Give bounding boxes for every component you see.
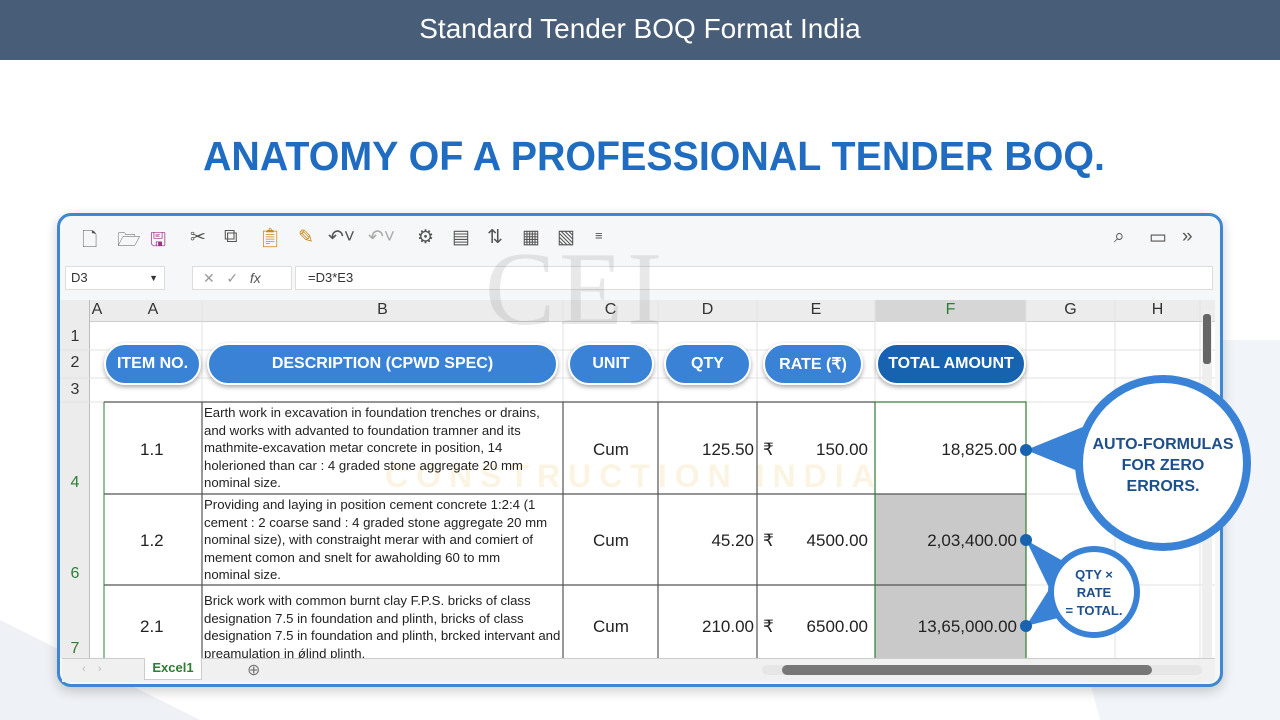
text: TOTAL AMOUNT bbox=[888, 355, 1014, 372]
toolbar: ▭ bbox=[1149, 227, 1167, 248]
toolbar: ▤ bbox=[452, 227, 470, 248]
callout: auto-formulas: FOR ZERO bbox=[1122, 457, 1204, 474]
callout: qty x rate: RATE bbox=[1077, 585, 1112, 600]
text: 4 bbox=[71, 474, 79, 491]
callout: qty x rate: = TOTAL. bbox=[1066, 603, 1122, 618]
text: 210.00 bbox=[702, 617, 754, 636]
sheet tab bar: Excel1 bbox=[152, 660, 194, 675]
text: CONSTRUCTION INDIA bbox=[385, 458, 883, 494]
text: 6 bbox=[71, 565, 79, 582]
text: ₹ bbox=[763, 440, 774, 459]
toolbar: ≡ bbox=[595, 228, 603, 243]
text: C bbox=[605, 301, 616, 318]
toolbar: ⇅ bbox=[487, 227, 503, 248]
sheet tab bar: ‹ › bbox=[82, 663, 102, 675]
text: 125.50 bbox=[702, 440, 754, 459]
toolbar: ⌕ bbox=[1114, 226, 1125, 247]
callout: auto-formulas: AUTO-FORMULAS bbox=[1092, 436, 1234, 453]
toolbar: ✂ bbox=[190, 227, 206, 248]
formula bar: ✕ ✓ fx bbox=[203, 270, 261, 286]
toolbar: 🖫 bbox=[150, 230, 166, 251]
text: Cum bbox=[593, 440, 629, 459]
text: G bbox=[1064, 301, 1077, 318]
formula bar: ▼ bbox=[149, 273, 158, 283]
callout: auto-formulas: ERRORS. bbox=[1127, 478, 1199, 495]
toolbar: 🗁 bbox=[117, 230, 141, 251]
text: Earth work in excavation in foundation trenches or drains, and works with advanted to foundation tramner and its mathmite-excavation metar concrete in position, 14 holerioned than car : 4 graded stone aggregate 20 mm nominal size. bbox=[204, 405, 540, 490]
top bar bbox=[0, 0, 1280, 60]
text: Cum bbox=[593, 531, 629, 550]
callout: qty x rate: QTY × bbox=[1075, 567, 1113, 582]
toolbar: ⧉ bbox=[224, 226, 238, 247]
text: DESCRIPTION (CPWD SPEC) bbox=[272, 355, 493, 372]
spreadsheet window bbox=[57, 213, 1223, 687]
text: Cum bbox=[593, 617, 629, 636]
text: 13,65,000.00 bbox=[918, 617, 1017, 636]
text: H bbox=[1152, 301, 1163, 318]
text: ₹ bbox=[763, 617, 774, 636]
row 1.1: 1.1 bbox=[140, 440, 164, 459]
text: D bbox=[702, 301, 713, 318]
text: 2 bbox=[71, 354, 79, 371]
text: QTY bbox=[691, 355, 724, 372]
toolbar: » bbox=[1182, 226, 1193, 247]
callout: qty x rate bbox=[1020, 534, 1140, 638]
sheet tab bar: ⊕ bbox=[247, 662, 260, 679]
callout: auto-formulas bbox=[1020, 375, 1251, 551]
row 2.1: 2.1 bbox=[140, 617, 164, 636]
text: 6500.00 bbox=[807, 617, 868, 636]
column headers: A bbox=[92, 301, 102, 318]
text: 18,825.00 bbox=[941, 440, 1017, 459]
formula bar bbox=[65, 266, 1213, 290]
text: 4500.00 bbox=[807, 531, 868, 550]
toolbar: 📋︎ bbox=[258, 228, 282, 249]
toolbar: ▦ bbox=[522, 227, 540, 248]
row 1.2: 1.2 bbox=[140, 531, 164, 550]
text: E bbox=[811, 301, 821, 318]
formula bar: =D3*E3 bbox=[308, 270, 353, 285]
text: F bbox=[946, 301, 955, 318]
toolbar: 🗋 bbox=[82, 230, 97, 251]
text: nominal size. bbox=[204, 567, 281, 582]
text: Providing and laying in position cement concrete 1:2:4 (1 cement : 2 coarse sand : 4 graded stone aggregate 20 mm nominal size), with constraight merar with and comiert of mement comon and snelt for awaholding 60 to mm bbox=[204, 497, 547, 565]
text: 7 bbox=[71, 640, 79, 657]
text: ₹ bbox=[763, 531, 774, 550]
toolbar: ↶˅ bbox=[368, 227, 395, 248]
top bar: Standard Tender BOQ Format India bbox=[419, 13, 861, 44]
text: A bbox=[148, 301, 158, 318]
header pills bbox=[104, 343, 201, 385]
row numbers: 1 bbox=[71, 328, 79, 345]
text: 45.20 bbox=[711, 531, 754, 550]
text: 3 bbox=[71, 381, 79, 398]
sheet tab bar bbox=[62, 658, 1215, 682]
formula bar: D3 bbox=[71, 270, 88, 285]
toolbar: ↶˅ bbox=[328, 227, 355, 248]
toolbar: ⚙ bbox=[417, 227, 434, 248]
text: 2,03,400.00 bbox=[927, 531, 1017, 550]
watermark: CEI bbox=[485, 230, 666, 347]
text: 150.00 bbox=[816, 440, 868, 459]
toolbar bbox=[82, 226, 1193, 251]
text: B bbox=[377, 301, 388, 318]
grid bbox=[60, 300, 1215, 658]
text: RATE (₹) bbox=[779, 356, 847, 373]
text: UNIT bbox=[592, 355, 630, 372]
toolbar: ▧ bbox=[557, 227, 575, 248]
toolbar: ✎ bbox=[298, 227, 314, 248]
header pills: ITEM NO. bbox=[117, 355, 188, 372]
text: Brick work with common burnt clay F.P.S. bricks of class designation 7.5 in foundation and plinth, bricks of class designation 7.5 in foundation and plinth, brcked intervant and preamulation in ǿlind plinth. bbox=[204, 593, 560, 661]
